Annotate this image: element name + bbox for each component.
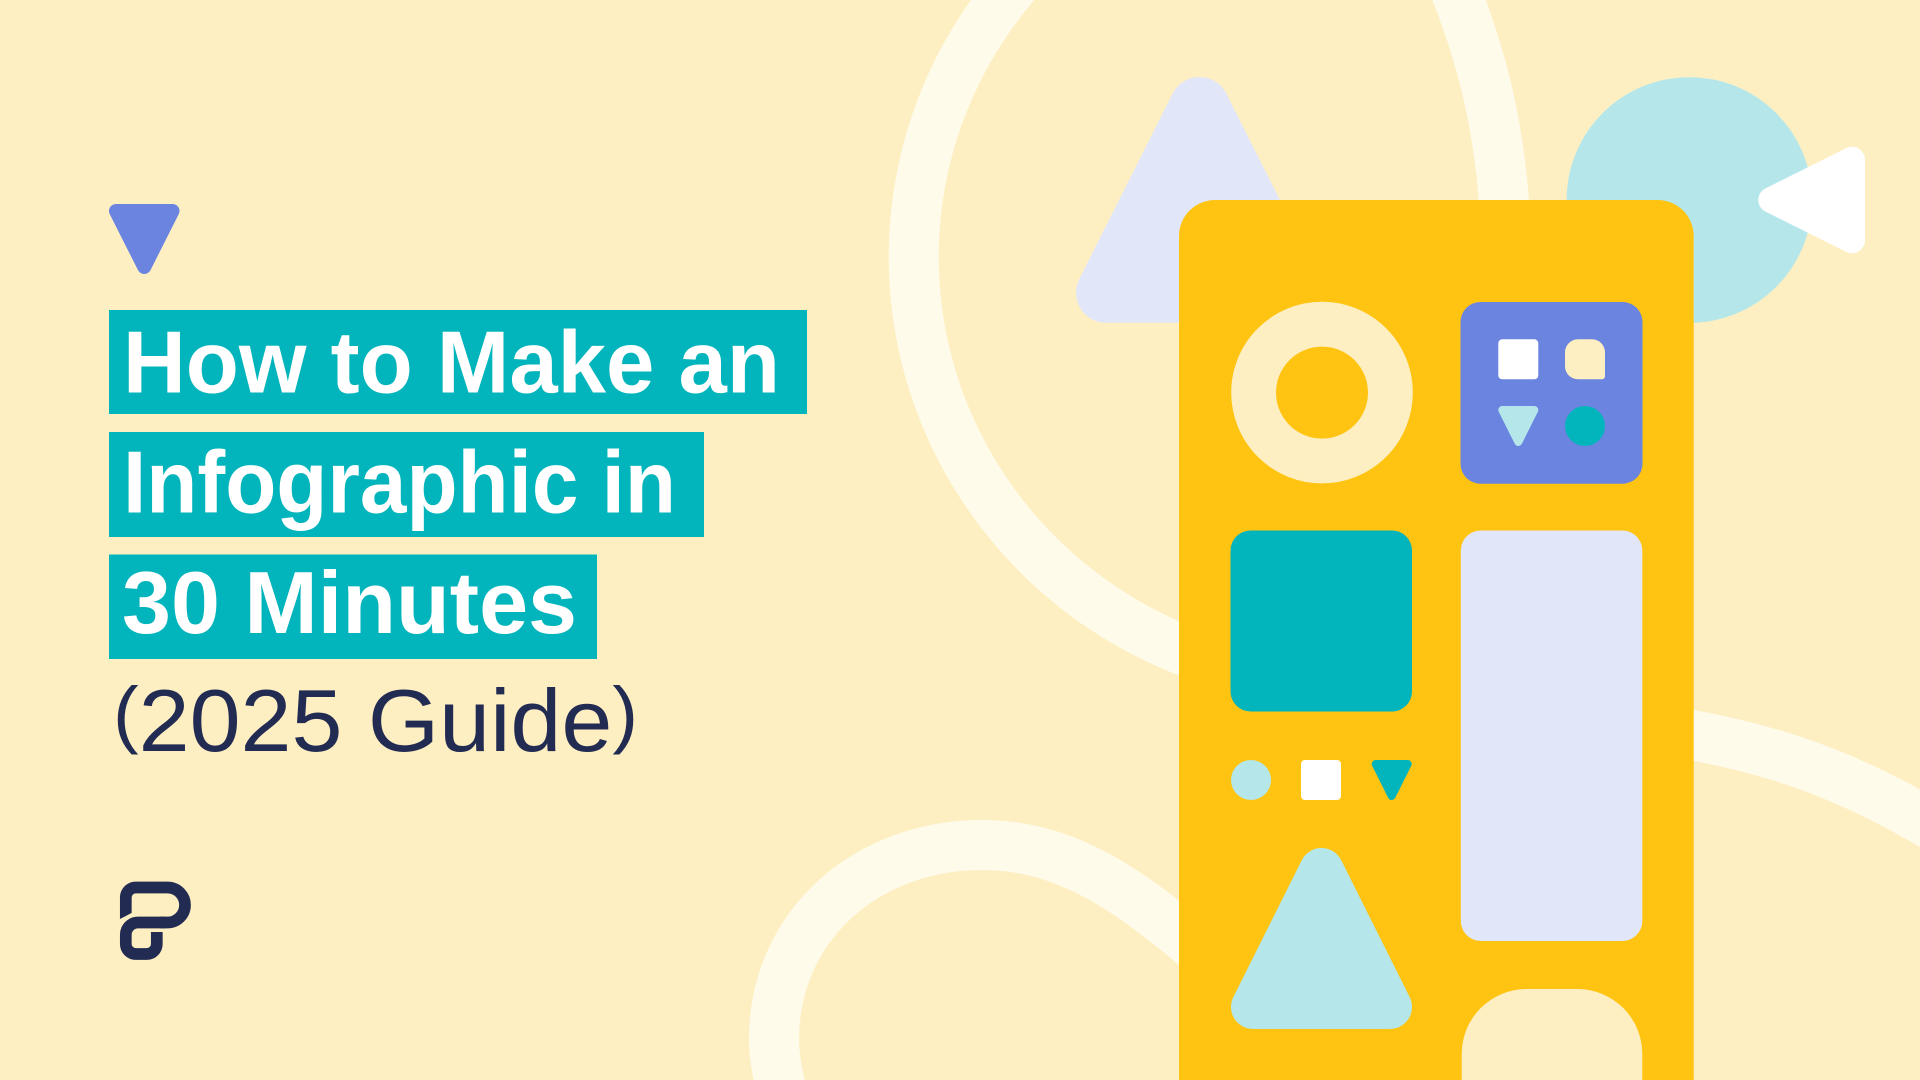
subtitle: 2025 Guide (139, 671, 612, 770)
teal square (1230, 530, 1412, 712)
large light teal triangle (1253, 870, 1390, 1007)
small light teal circle (1231, 760, 1271, 800)
small teal triangle (1376, 764, 1408, 796)
ring (1254, 324, 1390, 461)
panel: blue icon tile (1460, 302, 1642, 484)
cream arch (1462, 989, 1642, 1080)
lavender tall panel (1461, 530, 1642, 941)
icon: logo (118, 888, 185, 954)
panel: yellow card (1179, 200, 1694, 1080)
title line 2: Infographic in (123, 432, 676, 532)
title line 1: How to Make an (123, 312, 780, 412)
small white square (1301, 760, 1341, 800)
cream rounded square (1565, 339, 1605, 379)
icon: small blue triangle (116, 211, 172, 267)
background curves (774, 0, 1920, 1080)
white triangle (1771, 160, 1852, 240)
white square (1498, 339, 1538, 379)
title block (109, 310, 807, 770)
background teal circle (1567, 77, 1812, 323)
title line 3: 30 Minutes (122, 553, 577, 652)
teal circle (1565, 406, 1605, 446)
background lavender triangle (1106, 107, 1293, 293)
light teal triangle (1502, 410, 1534, 442)
subtitle: ) (612, 672, 638, 755)
subtitle: ( (113, 672, 139, 755)
